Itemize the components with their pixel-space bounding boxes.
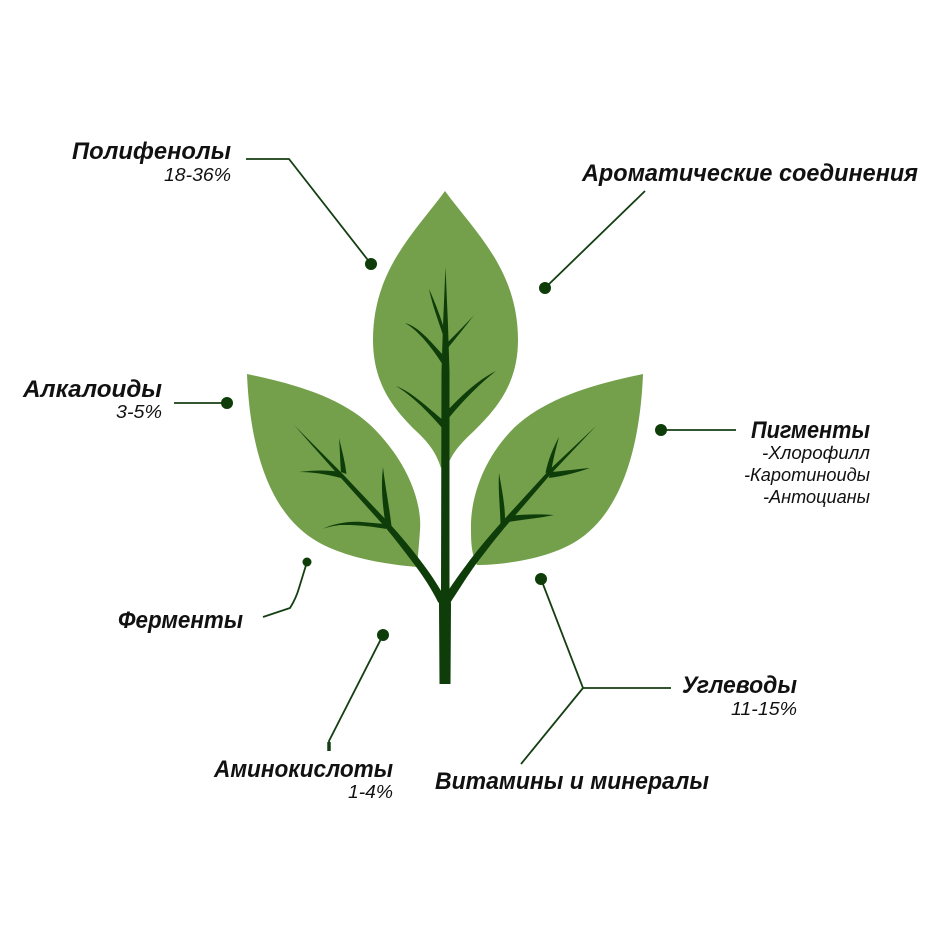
label: pigments: -Каротиноиды	[744, 465, 870, 485]
top leaf	[373, 191, 518, 468]
label: amino acids	[213, 756, 393, 802]
label: pigments: Пигменты	[751, 417, 870, 444]
label: alkaloids	[22, 376, 163, 422]
label: vitamins and minerals: Витамины и минералы	[435, 768, 709, 795]
right leaf	[471, 374, 643, 565]
plant illustration	[247, 191, 643, 684]
left leaf	[247, 374, 420, 567]
label: alkaloids: Алкалоиды	[22, 376, 163, 403]
label: aromatic compounds: Ароматические соединения	[581, 160, 918, 187]
stem and veins	[294, 267, 596, 684]
label: pigments: -Хлорофилл	[762, 443, 870, 463]
label: amino acids: Аминокислоты	[213, 756, 393, 783]
connector lines	[174, 159, 736, 764]
label: pigments: -Антоцианы	[763, 487, 870, 507]
top leaf veins	[429, 289, 444, 335]
label: carbohydrates: 11-15%	[731, 699, 797, 719]
label: polyphenols: Полифенолы	[72, 138, 231, 165]
connector dots	[221, 258, 667, 641]
label: polyphenols	[72, 138, 231, 185]
label: pigments	[744, 417, 870, 507]
central stem	[439, 267, 451, 684]
right branch veins	[446, 426, 596, 610]
label: carbohydrates: Углеводы	[682, 672, 797, 699]
label: amino acids: 1-4%	[348, 782, 393, 802]
left branch veins	[294, 425, 445, 610]
label: polyphenols: 18-36%	[164, 165, 231, 185]
label: carbohydrates	[682, 672, 797, 719]
label: alkaloids: 3-5%	[116, 402, 162, 422]
label: enzymes: Ферменты	[118, 607, 243, 634]
